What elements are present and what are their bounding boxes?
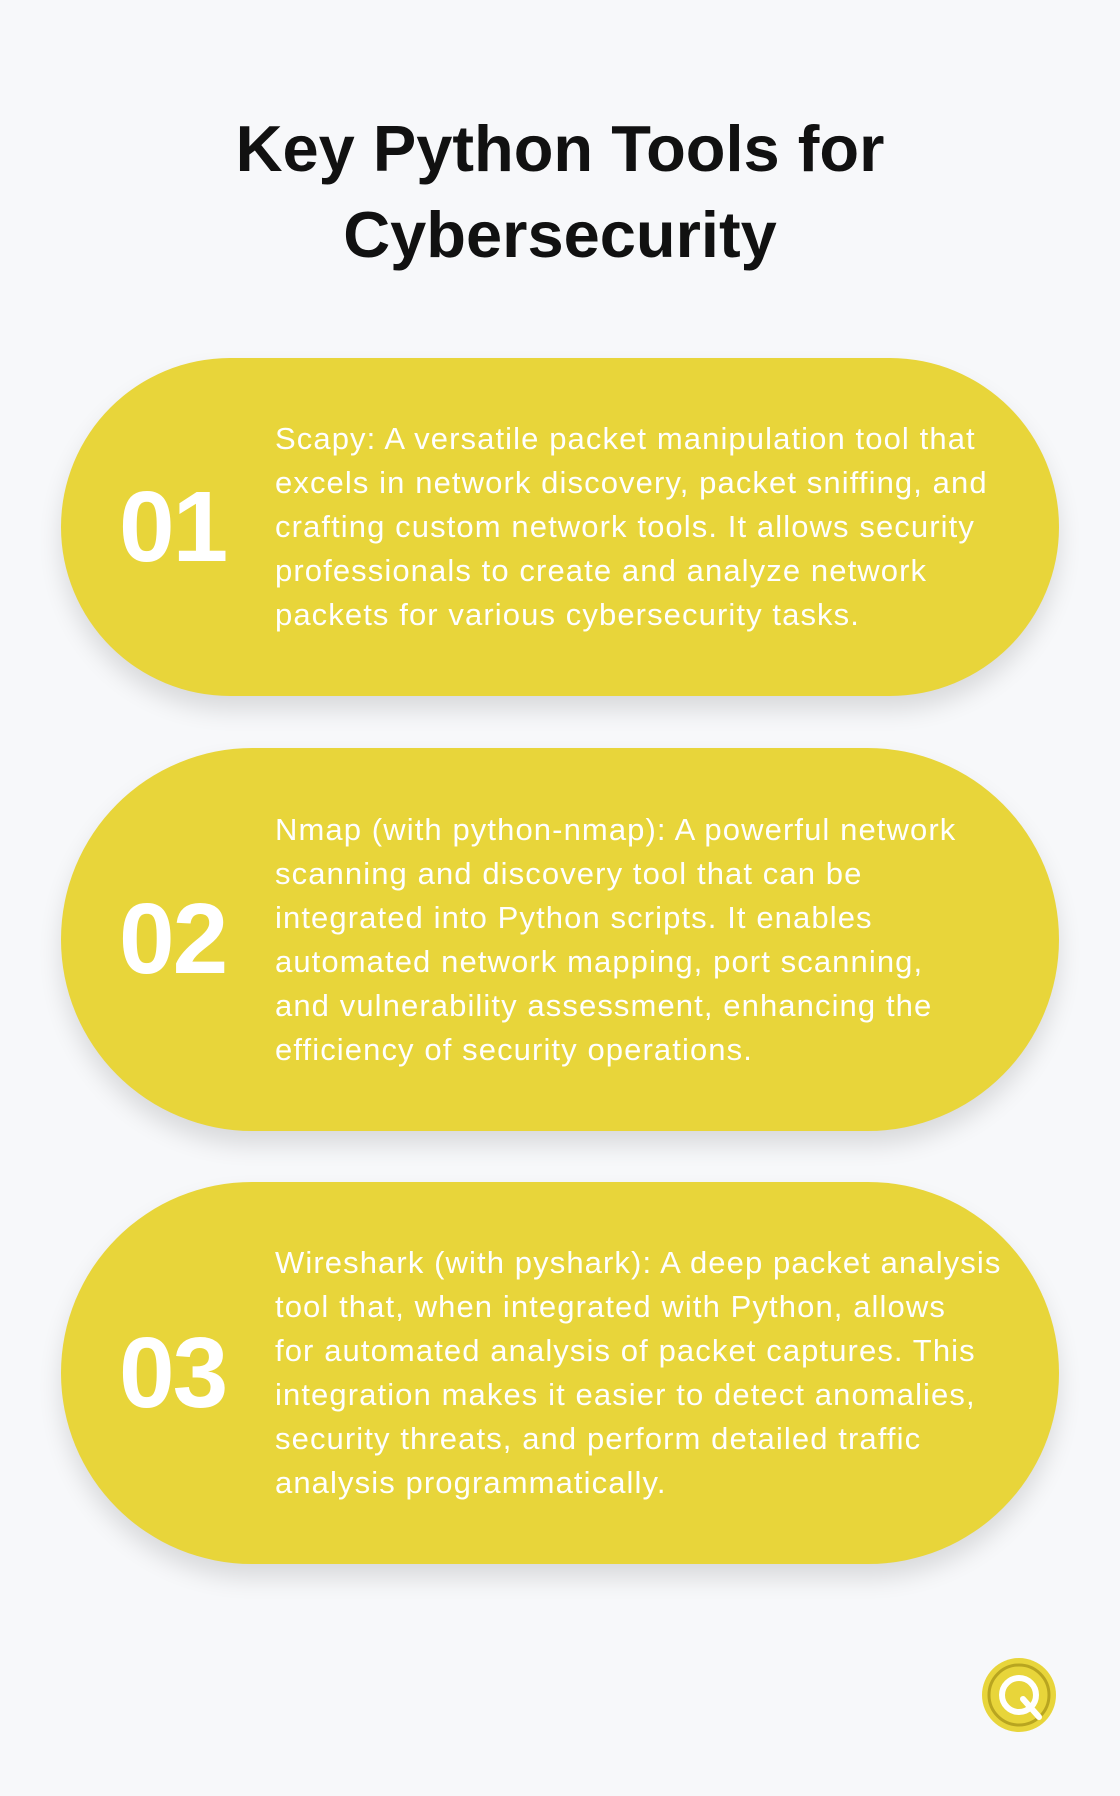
text: nmap: Nmap (with python-nmap): A powerful network bbox=[275, 812, 956, 846]
title: Key Python Tools for bbox=[236, 112, 884, 185]
text: nmap: and vulnerability assessment, enhancing the bbox=[275, 988, 932, 1022]
text: nmap bbox=[275, 812, 956, 1066]
number 03: 03 bbox=[119, 1316, 226, 1428]
text: nmap: scanning and discovery tool that can be bbox=[275, 856, 862, 890]
text: wireshark: integration makes it easier to detect anomalies, bbox=[275, 1377, 976, 1412]
number 01: 01 bbox=[119, 470, 226, 582]
panel: scapy bbox=[61, 358, 1059, 696]
text: nmap: efficiency of security operations. bbox=[275, 1032, 753, 1066]
text: scapy: packets for various cybersecurity tasks. bbox=[275, 597, 860, 632]
text: wireshark bbox=[275, 1245, 1001, 1500]
icon: logo bbox=[982, 1658, 1056, 1732]
text: scapy: Scapy: A versatile packet manipulation tool that bbox=[275, 421, 976, 456]
text: nmap: automated network mapping, port scanning, bbox=[275, 944, 923, 978]
text: wireshark: analysis programmatically. bbox=[275, 1465, 667, 1500]
text: scapy: professionals to create and analyze network bbox=[275, 553, 927, 588]
text: scapy: excels in network discovery, packet sniffing, and bbox=[275, 465, 988, 500]
text: wireshark: for automated analysis of packet captures. This bbox=[275, 1333, 976, 1368]
text: wireshark: security threats, and perform detailed traffic bbox=[275, 1421, 921, 1456]
panel: wireshark bbox=[61, 1182, 1059, 1564]
text: nmap: integrated into Python scripts. It enables bbox=[275, 900, 873, 934]
text: wireshark: Wireshark (with pyshark): A deep packet analysis bbox=[275, 1245, 1001, 1280]
panel: nmap bbox=[61, 748, 1059, 1131]
number 02: 02 bbox=[119, 883, 226, 995]
text: scapy bbox=[275, 421, 988, 632]
title bbox=[236, 112, 884, 271]
text: scapy: crafting custom network tools. It allows security bbox=[275, 509, 975, 544]
title: Cybersecurity bbox=[343, 198, 777, 271]
text: wireshark: tool that, when integrated with Python, allows bbox=[275, 1289, 946, 1324]
